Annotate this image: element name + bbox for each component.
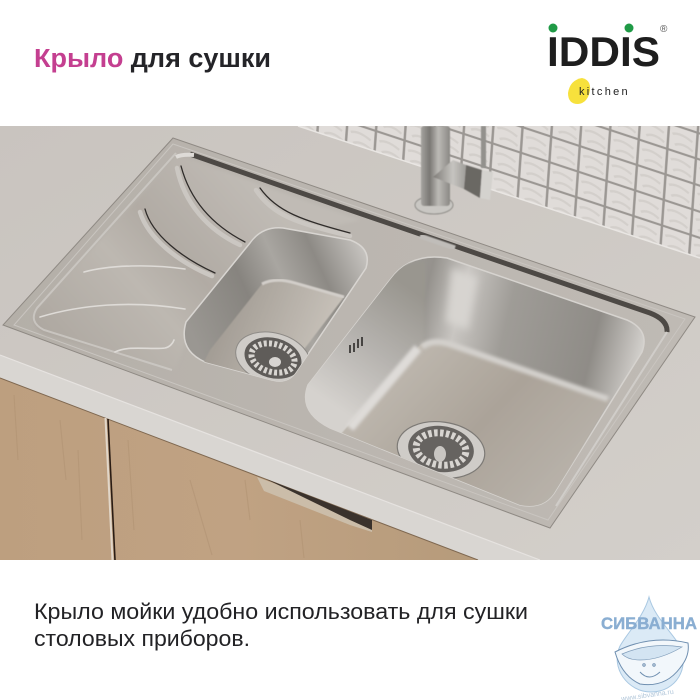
- photo: stainless sink in countertop: [0, 126, 700, 560]
- big bowl: [295, 257, 644, 511]
- big bowl left edge highlight: [350, 348, 418, 428]
- big bowl bright spot: [446, 268, 478, 330]
- description line 1: Крыло мойки удобно использовать для сушки: [34, 599, 528, 624]
- logo green dots: [548, 24, 634, 32]
- groove 1: [177, 166, 245, 245]
- big bowl back edge highlight: [422, 342, 608, 399]
- faucet rod: [481, 126, 486, 168]
- logo: iddis kitchen: [547, 24, 668, 104]
- right rim edge: [556, 332, 667, 506]
- faucet: [415, 126, 493, 214]
- groove 3: [256, 188, 350, 236]
- faucet base: [415, 196, 453, 214]
- big drain: [394, 416, 488, 484]
- counter front edge: [0, 355, 540, 560]
- drainer grooves: [40, 166, 350, 352]
- watermark drop: [617, 597, 683, 692]
- big bowl walls: [306, 257, 644, 506]
- counter edge line: [0, 355, 540, 560]
- logo yellow blob: [568, 78, 590, 104]
- countertop: [0, 126, 700, 560]
- watermark name: СИБВАННА: [601, 614, 697, 633]
- groove 5: [40, 304, 185, 317]
- faucet body: [421, 126, 450, 206]
- door handle: [257, 477, 372, 532]
- watermark: sibvanna: [601, 597, 697, 700]
- small bowl: [184, 228, 367, 392]
- watermark tub rim: [622, 646, 682, 660]
- big bowl floor: [340, 341, 610, 511]
- channel bright corner: [176, 155, 194, 157]
- drainer wing: [178, 249, 214, 291]
- sink rim line: [14, 144, 685, 520]
- watermark face: [640, 664, 660, 677]
- big bowl left wall: [306, 261, 422, 432]
- big bowl interior: [295, 262, 610, 511]
- description text: [34, 599, 528, 651]
- groove 6: [115, 340, 174, 352]
- overflow slots: [350, 337, 362, 353]
- watermark tub: [615, 640, 688, 685]
- channel highlight: [420, 236, 455, 248]
- sink plate: [3, 138, 695, 528]
- rear channel: [190, 154, 667, 332]
- door gap: [108, 419, 115, 560]
- logo subtitle: kitchen: [579, 86, 630, 98]
- description line 2: столовых приборов.: [34, 626, 250, 651]
- sink: [3, 138, 695, 528]
- small bowl walls: [184, 228, 367, 381]
- small bowl floor highlight: [262, 280, 344, 297]
- title: Крыло для сушки: [34, 45, 271, 73]
- small bowl interior: [204, 279, 345, 381]
- wing pressed edge: [34, 153, 176, 370]
- small drain: [235, 331, 308, 381]
- cabinet wood doors: [0, 378, 478, 560]
- groove 4: [84, 266, 185, 272]
- tile backsplash: [298, 126, 700, 258]
- groove 2: [140, 209, 215, 276]
- logo wordmark: IDDIS: [547, 28, 660, 75]
- small bowl floor: [200, 280, 344, 385]
- faucet lever: [433, 160, 466, 189]
- registered mark: ®: [660, 24, 668, 35]
